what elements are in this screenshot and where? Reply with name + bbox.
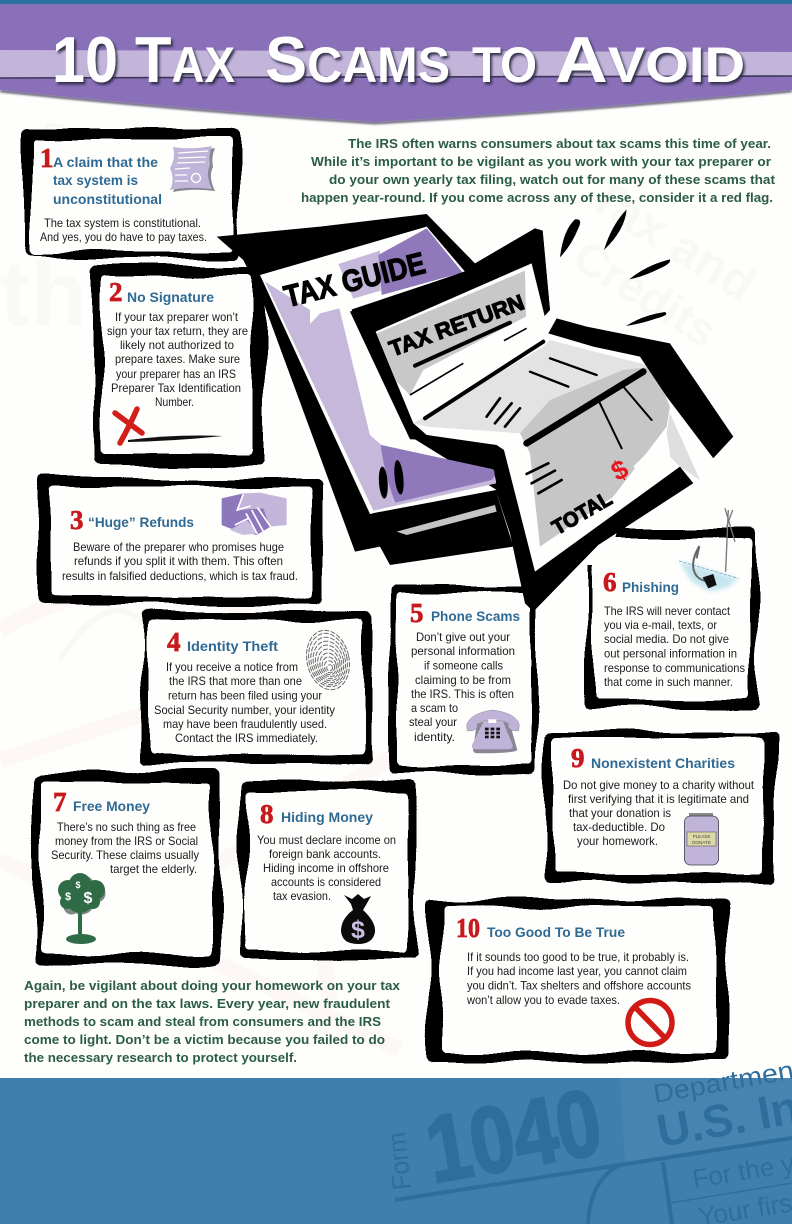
panel 2: no signature — [92, 264, 265, 465]
header banner — [0, 0, 792, 123]
panel 8: hiding money: 8 — [260, 799, 274, 829]
closing text: preparer and on the tax laws. Every year, new fraudulent — [24, 996, 391, 1011]
panel 3: huge refunds: results in falsified deductions, which is tax fraud. — [62, 569, 298, 583]
panel 8: hiding money: accounts is considered — [271, 875, 381, 889]
panel 5: phone scams: if someone calls — [424, 658, 503, 672]
intro text: do your own yearly tax filing, watch out for many of these scams that — [329, 172, 776, 187]
icon: scroll — [170, 146, 215, 192]
panel 10: too good to be true: If it sounds too good to be true, it probably is. — [467, 950, 689, 964]
panel 3: huge refunds: “Huge” Refunds — [88, 515, 194, 530]
title — [52, 23, 745, 96]
tax return sheet: $ — [606, 453, 633, 487]
panel 9: nonexistent charities: tax-deductible. Do — [573, 820, 665, 834]
panel 7: free money: Security. These claims usually — [51, 848, 199, 862]
panel 8: hiding money: You must declare income on — [257, 833, 396, 847]
panel 9: nonexistent charities: that your donation is — [569, 806, 671, 820]
illustration: tax guide and tax return — [217, 209, 733, 612]
panel 2: no signature: likely not authorized to — [120, 338, 234, 352]
closing text: methods to scam and steal from consumers and the IRS — [24, 1014, 381, 1029]
title: SCAMS — [265, 23, 450, 96]
panel 8: hiding money: Hiding income in offshore — [263, 861, 389, 875]
panel 4: identity theft: Identity Theft — [187, 639, 278, 654]
panel 2: no signature: If your tax preparer won’t — [115, 310, 239, 324]
panel 2: no signature: sign your tax return, they are — [107, 324, 248, 338]
footer: form 1040 band: Department — [651, 1053, 792, 1109]
icon: donation jar: PLEASE — [693, 834, 710, 839]
panel 2: no signature: Preparer Tax Identification — [111, 381, 241, 395]
panel 7: free money: target the elderly. — [110, 862, 197, 876]
icon: red X on signature line — [115, 409, 223, 443]
intro text: While it’s important to be vigilant as you work with your tax preparer or — [311, 154, 771, 169]
intro text: happen year-round. If you come across any of these, consider it a red flag. — [301, 190, 773, 205]
panel 4: identity theft: return has been filed using your — [168, 688, 322, 702]
panel 7: free money: There’s no such thing as free — [57, 820, 196, 834]
panel 5: phone scams: the IRS. This is often — [411, 687, 514, 701]
closing text: come to light. Don’t be a victim because you failed to do — [24, 1032, 385, 1047]
panel 6: phishing: Phishing — [622, 580, 679, 595]
book cover — [260, 227, 497, 535]
panel 4: identity theft: If you receive a notice from — [166, 660, 298, 674]
intro text: The IRS often warns consumers about tax scams this time of year. — [348, 136, 771, 151]
panel 5: phone scams: steal your — [409, 715, 457, 729]
title: 10 — [52, 23, 118, 96]
panel 10: too good to be true: you didn’t. Tax shelters and offshore accounts — [467, 978, 691, 992]
watermark: faint tax form background: Form 1040 — [39, 115, 236, 176]
panel 10: too good to be true: If you had income last year, you cannot claim — [467, 964, 687, 978]
icon: money tree: $ — [65, 891, 71, 903]
footer: form 1040 band: 1040 — [418, 1069, 609, 1203]
panel 1: unconstitutional claim: unconstitutional — [53, 192, 162, 207]
panel 1: unconstitutional claim: The tax system is constitutional. — [44, 216, 201, 230]
panel 5: phone scams: personal information — [411, 644, 515, 658]
icon: money bag — [341, 894, 375, 944]
sheet right black band — [548, 318, 733, 458]
panel 4: identity theft: 4 — [167, 627, 180, 657]
panel 8: hiding money: tax evasion. — [273, 889, 331, 903]
closing text — [24, 978, 401, 1065]
watermark: faint tax form background: this — [0, 243, 164, 345]
panel 7: free money: Free Money — [73, 799, 150, 814]
title: TAX — [135, 23, 235, 96]
title: AVOID — [555, 23, 745, 96]
icon: money tree — [58, 873, 106, 944]
icon: fingerprint — [301, 626, 355, 694]
panel 5: phone scams: Don’t give out your — [416, 630, 510, 644]
panel 9: nonexistent charities: your homework. — [577, 834, 658, 848]
panel 6: phishing: response to communications — [604, 661, 745, 675]
panel 5: phone scams — [390, 584, 538, 774]
panel 5: phone scams: 5 — [410, 598, 424, 628]
panel 9: nonexistent charities — [545, 731, 776, 882]
panel 10: too good to be true: Too Good To Be True — [487, 925, 625, 940]
panel 1: unconstitutional claim: tax system is — [53, 173, 138, 188]
footer: form 1040 band: Form — [381, 1131, 417, 1192]
book cover: TAX GUIDE — [281, 246, 429, 314]
panel 4: identity theft: may have been fraudulently used. — [163, 717, 327, 731]
tax return sheet: TOTAL — [548, 487, 616, 540]
panel 2: no signature: 2 — [109, 277, 122, 307]
return sheet frame — [350, 228, 550, 440]
closing text: the necessary research to protect yourself. — [24, 1050, 297, 1065]
panel 6: phishing: that come in such manner. — [604, 675, 733, 689]
tax return sheet — [376, 263, 700, 573]
panel 2: no signature: prepare taxes. Make sure — [115, 352, 240, 366]
panel 6: phishing: 6 — [603, 567, 616, 597]
panel 3: huge refunds — [38, 478, 324, 604]
panel 10: too good to be true: 10 — [456, 913, 480, 943]
watermark: faint tax form background: Tax and — [579, 167, 766, 312]
panel 7: free money — [34, 771, 221, 966]
panel 7: free money: 7 — [53, 787, 66, 817]
panel 1: unconstitutional claim: A claim that the — [53, 155, 158, 170]
icon: handshake — [222, 493, 287, 535]
panel 9: nonexistent charities: first verifying that it is legitimate and — [568, 792, 749, 806]
panel 7: free money: money from the IRS or Social — [55, 834, 198, 848]
panel 10: too good to be true: won’t allow you to evade taxes. — [466, 993, 620, 1007]
watermark: faint tax form background: Credits — [565, 229, 727, 357]
panel 9: nonexistent charities: Do not give money to a charity without — [563, 778, 755, 792]
icon: money bag: $ — [351, 916, 365, 944]
icon: prohibition sign — [628, 1000, 672, 1044]
panel 5: phone scams: Phone Scams — [431, 609, 520, 624]
sheet lower black fold — [427, 435, 693, 612]
panel 3: huge refunds: Beware of the preparer who promises huge — [73, 540, 284, 554]
panel 4: identity theft: Contact the IRS immediately. — [175, 731, 318, 745]
footer: form 1040 band — [0, 1053, 792, 1224]
panel 1: unconstitutional claim: 1 — [40, 143, 54, 173]
panel 6: phishing: social media. Do not give — [604, 632, 729, 646]
panel 8: hiding money: foreign bank accounts. — [269, 847, 381, 861]
panel 4: identity theft: the IRS that more than one — [169, 674, 302, 688]
icon: fish hook in water — [679, 508, 738, 592]
closing text: Again, be vigilant about doing your homework on your tax — [24, 978, 401, 993]
panel 6: phishing: you via e-mail, texts, or — [604, 618, 717, 632]
book silhouette — [217, 214, 550, 565]
panel 5: phone scams: identity. — [414, 730, 455, 744]
panel 8: hiding money: Hiding Money — [281, 810, 373, 825]
panel 9: nonexistent charities: Nonexistent Charities — [591, 756, 735, 771]
intro text — [301, 136, 776, 205]
icon: money tree: $ — [75, 880, 81, 890]
panel 3: huge refunds: 3 — [70, 505, 84, 535]
panel 8: hiding money — [240, 781, 416, 961]
panel 3: huge refunds: refunds if you split it with them. This often — [74, 554, 283, 568]
panel 4: identity theft: Social Security number, your identity — [154, 703, 335, 717]
icon: donation jar: DONATE — [692, 840, 711, 845]
icon: money tree: $ — [84, 890, 93, 907]
panel 6: phishing: out personal information in — [604, 646, 737, 660]
panel 1: unconstitutional claim — [23, 129, 239, 258]
icon: telephone — [467, 710, 519, 753]
panel 5: phone scams: claiming to be from — [415, 673, 511, 687]
icon: donation jar — [684, 813, 718, 865]
panel 2: no signature: No Signature — [127, 290, 214, 305]
panel 2: no signature: Number. — [155, 395, 194, 409]
tax return sheet: TAX RETURN — [386, 289, 527, 361]
motion dashes — [560, 209, 670, 326]
panel 4: identity theft — [142, 611, 372, 764]
panel 6: phishing — [575, 508, 757, 707]
panel 5: phone scams: a scam to — [411, 701, 458, 715]
title: TO — [472, 37, 537, 93]
panel 9: nonexistent charities: 9 — [571, 743, 584, 773]
panel 1: unconstitutional claim: And yes, you do have to pay taxes. — [40, 230, 207, 244]
panel 2: no signature: your preparer has an IRS — [116, 367, 236, 381]
panel 6: phishing: The IRS will never contact — [604, 604, 731, 618]
panel 10: too good to be true — [428, 898, 729, 1062]
watermark: faint tax form background — [0, 115, 766, 1050]
